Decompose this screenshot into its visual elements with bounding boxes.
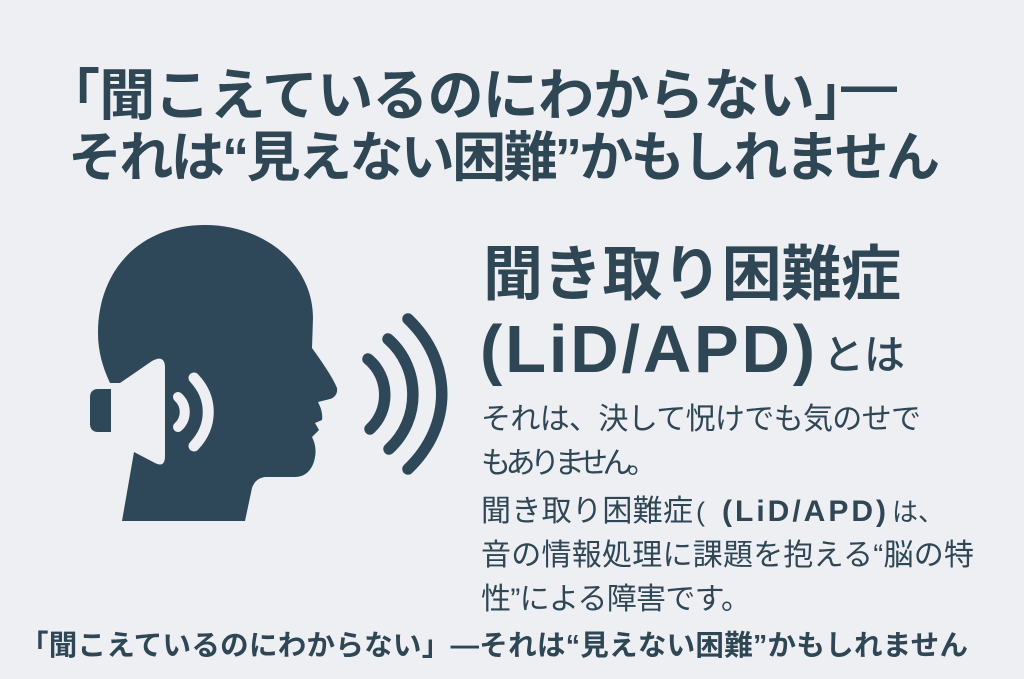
title: それは“見えない困難”かもしれません (68, 128, 940, 188)
title (44, 53, 940, 188)
body text: それは、決して怳けでも気のせで (481, 403, 921, 436)
heading: LiD/APD とは: (LiD/APD) (480, 312, 815, 387)
body text: は、 (892, 497, 944, 527)
ear sound arcs (178, 378, 208, 446)
heading: 聞き取り困難症: 聞き取り困難症 (483, 241, 901, 308)
footer tagline: 「聞こえているのにわからない」—それは“見えない困難”かもしれません (20, 630, 968, 662)
speaker back (90, 389, 111, 432)
title: 「聞こえているのにわからない」 (44, 64, 870, 127)
speaker cone (104, 359, 165, 464)
title: — (841, 53, 897, 116)
body text: もありません。 (481, 447, 657, 480)
body text (481, 403, 974, 616)
heading: LiD/APD とは: とは (823, 332, 905, 378)
body text: 音の情報処理に課題を抱える“脳の特 (481, 539, 974, 572)
body text: ( (696, 497, 705, 527)
outgoing sound waves (368, 319, 442, 469)
head silhouette (98, 225, 337, 521)
body text: 聞き取り困難症 (481, 495, 693, 528)
body text: 性”による障害です。 (481, 583, 751, 616)
body text: (LiD/APD) (722, 495, 886, 528)
icon: head with speaker and sound waves (90, 225, 442, 521)
